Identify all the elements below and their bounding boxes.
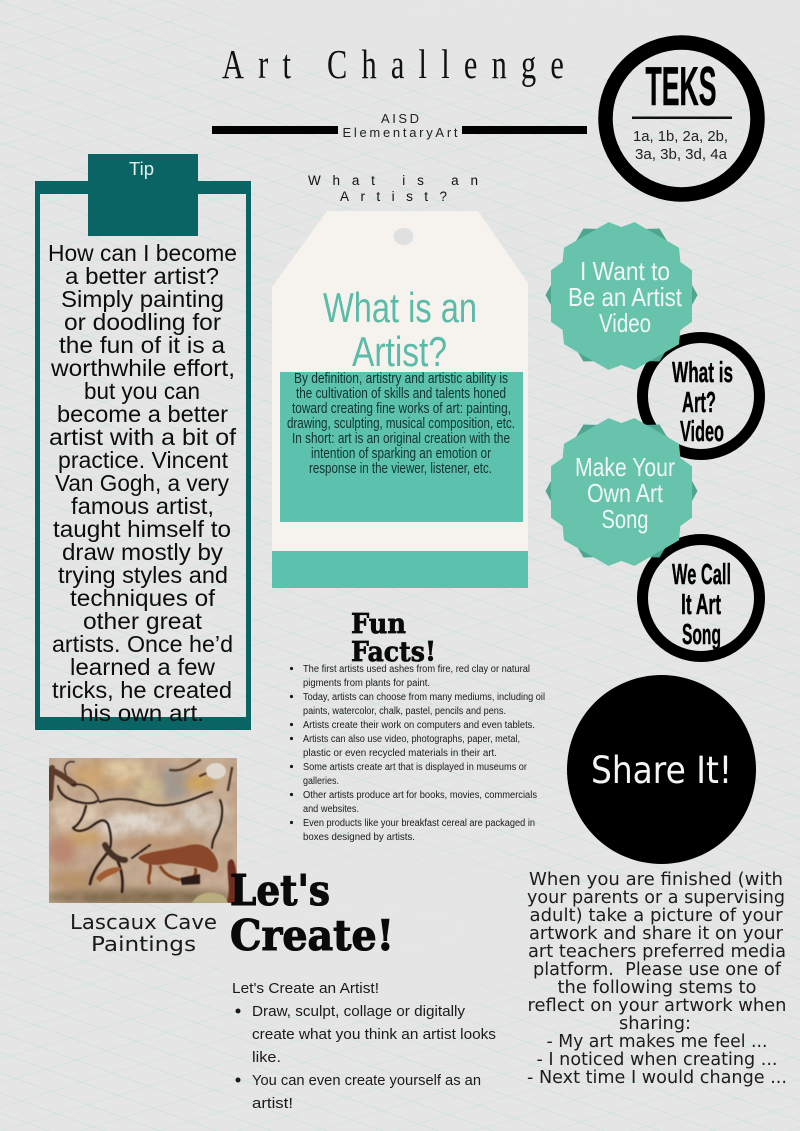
TEKS ring badge: 1a, 1b, 2a, 2b, xyxy=(633,128,728,145)
Let's Create instructions: create what you think an artist looks xyxy=(252,1026,496,1043)
Share instructions: - My art makes me feel ... xyxy=(546,1032,768,1052)
tip body text: become a better xyxy=(57,401,228,427)
tip label: Tip xyxy=(129,159,154,179)
header: AISD ElementaryArt with rule: AISD xyxy=(381,111,419,126)
tip body text: a better artist? xyxy=(65,263,219,289)
tip body text: tricks, he created xyxy=(52,677,232,703)
fun facts list: paints, watercolor, chalk, pastel, pencils and pens. xyxy=(303,706,506,717)
tip body text: taught himself to xyxy=(53,516,231,542)
subtitle: What is an Artist?: What is an xyxy=(308,173,478,188)
definition text: drawing, sculpting, musical composition, etc. xyxy=(287,415,515,432)
Share instructions xyxy=(527,870,787,1088)
Share instructions: reflect on your artwork when xyxy=(528,996,786,1016)
tag heading: What is an xyxy=(323,284,477,331)
tip tab xyxy=(88,154,198,236)
badge: I Want to Be an Artist Video xyxy=(546,222,698,370)
subtitle: What is an Artist? xyxy=(308,173,478,204)
ring label: What is Art? Video: Video xyxy=(680,416,724,448)
Share instructions: sharing: xyxy=(619,1014,691,1034)
fun facts list xyxy=(290,664,545,843)
subtitle: What is an Artist?: Artist? xyxy=(340,189,447,204)
fun facts heading xyxy=(351,609,436,668)
teal definition box xyxy=(280,372,523,522)
panel: tag xyxy=(272,211,528,588)
tip body text: Simply painting xyxy=(61,286,224,312)
Share instructions: adult) take a picture of your xyxy=(530,906,783,926)
tip body text: learned a few xyxy=(70,654,215,680)
fun facts list: Artists create their work on computers and even tablets. xyxy=(303,720,535,731)
badge: Make Your Own Art Song xyxy=(546,418,698,566)
tip body text: practice. Vincent xyxy=(58,447,229,473)
badge: Make Your Own Art Song: Own Art xyxy=(587,478,664,508)
TEKS ring badge xyxy=(606,42,758,194)
image caption: Lascaux Cave xyxy=(70,910,217,934)
fun facts list: Artists can also use video, photographs, paper, metal, xyxy=(303,734,520,745)
tip frame xyxy=(35,181,251,730)
badge: I Want to Be an Artist Video: Video xyxy=(599,308,651,338)
fun facts list: The first artists used ashes from fire, red clay or natural xyxy=(303,664,530,675)
image caption xyxy=(70,910,217,956)
fun facts list: Even products like your breakfast cereal are packaged in xyxy=(303,818,535,829)
Share instructions: your parents or a supervising xyxy=(527,888,785,908)
tip body text: other great xyxy=(83,608,203,634)
ring label: We Call It Art Song: Song xyxy=(682,619,721,651)
definition text xyxy=(287,370,515,477)
tip body text xyxy=(48,240,237,726)
panel: tip xyxy=(35,154,251,730)
Share instructions: artwork and share it on your xyxy=(529,924,784,944)
tip body text: How can I become xyxy=(48,240,237,266)
fun facts heading: Fun xyxy=(351,609,406,640)
Let's Create heading: Create! xyxy=(230,911,394,960)
ring label: What is Art? Video: What is xyxy=(672,357,733,389)
badge: Make Your Own Art Song: Song xyxy=(602,504,648,534)
tip body text: worthwhile effort, xyxy=(50,355,235,381)
Share It circle: Share It! xyxy=(591,749,732,792)
Share instructions: platform. Please use one of xyxy=(533,960,782,980)
tip body text: techniques of xyxy=(70,585,216,611)
tip body text: but you can xyxy=(84,378,200,404)
ring: What is Art? Video xyxy=(642,338,760,454)
Share instructions: When you are finished (with xyxy=(529,870,783,890)
tip body text: or doodling for xyxy=(64,309,221,335)
ring label: What is Art? Video xyxy=(672,357,733,448)
Share instructions: - I noticed when creating ... xyxy=(536,1050,778,1070)
definition text: toward creating fine works of art: painting, xyxy=(292,400,511,417)
tag heading: Artist? xyxy=(352,328,447,375)
definition text: By definition, artistry and artistic ability is xyxy=(294,370,508,387)
fun facts heading: Facts! xyxy=(351,637,436,668)
fun facts list: pigments from plants for paint. xyxy=(303,678,430,689)
tip body text: artists. Once he’d xyxy=(52,631,233,657)
tag shape xyxy=(272,211,528,588)
Let's Create instructions: Let's Create an Artist! xyxy=(232,980,379,997)
Share instructions: art teachers preferred media xyxy=(528,942,786,962)
TEKS ring badge: 3a, 3b, 3d, 4a xyxy=(635,146,728,163)
badge: I Want to Be an Artist Video: Be an Artist xyxy=(568,282,683,312)
definition text: the cultivation of skills and talents honed xyxy=(296,385,506,402)
fun facts list: galleries. xyxy=(303,776,339,787)
definition text: In short: art is an original creation with the xyxy=(292,430,510,447)
Share instructions: the following stems to xyxy=(558,978,756,998)
Share It circle xyxy=(567,675,756,864)
tag heading xyxy=(323,284,477,375)
Let's Create heading: Let's xyxy=(230,866,330,915)
tip body text: artist with a bit of xyxy=(49,424,237,450)
ring label: We Call It Art Song xyxy=(672,559,731,651)
ring label: What is Art? Video: Art? xyxy=(682,387,716,419)
tip body text: famous artist, xyxy=(71,493,214,519)
fun facts list: boxes designed by artists. xyxy=(303,832,415,843)
Let's Create instructions: like. xyxy=(252,1049,281,1066)
definition text: intention of sparking an emotion or xyxy=(311,445,491,462)
image caption: Paintings xyxy=(91,932,196,956)
header: AISD ElementaryArt with rule: ElementaryArt xyxy=(342,125,458,140)
definition text: response in the viewer, listener, etc. xyxy=(309,460,492,477)
tip body text: draw mostly by xyxy=(62,539,224,565)
Share instructions: - Next time I would change ... xyxy=(527,1068,787,1088)
tip body text: his own art. xyxy=(80,700,204,726)
Let's Create instructions: Draw, sculpt, collage or digitally xyxy=(252,1003,466,1020)
header: AISD ElementaryArt with rule xyxy=(212,111,587,140)
ring: We Call It Art Song xyxy=(642,540,760,656)
TEKS ring badge: TEKS xyxy=(646,55,716,117)
tip body text: the fun of it is a xyxy=(59,332,225,358)
fun facts list: plastic or even recycled materials in their art. xyxy=(303,748,497,759)
Let's Create instructions: artist! xyxy=(252,1095,293,1112)
Let's Create instructions: You can even create yourself as an xyxy=(252,1072,481,1089)
title: Art Challenge xyxy=(222,42,564,87)
badge: I Want to Be an Artist Video: I Want to xyxy=(580,256,670,286)
fun facts list: Some artists create art that is displayed in museums or xyxy=(303,762,528,773)
Let's Create instructions xyxy=(232,980,496,1112)
badge: Make Your Own Art Song: Make Your xyxy=(575,452,675,482)
Let's Create heading xyxy=(230,866,394,960)
tip body text: trying styles and xyxy=(58,562,228,588)
tag hole xyxy=(394,228,414,245)
ring label: We Call It Art Song: It Art xyxy=(681,589,721,621)
tag band xyxy=(272,551,528,588)
fun facts list: Today, artists can choose from many mediums, including oil xyxy=(303,692,545,703)
fun facts list: Other artists produce art for books, movies, commercials xyxy=(303,790,537,801)
image: Lascaux cave painting xyxy=(45,758,237,905)
fun facts list: and websites. xyxy=(303,804,359,815)
tip body text: Van Gogh, a very xyxy=(55,470,229,496)
ring label: We Call It Art Song: We Call xyxy=(672,559,731,591)
